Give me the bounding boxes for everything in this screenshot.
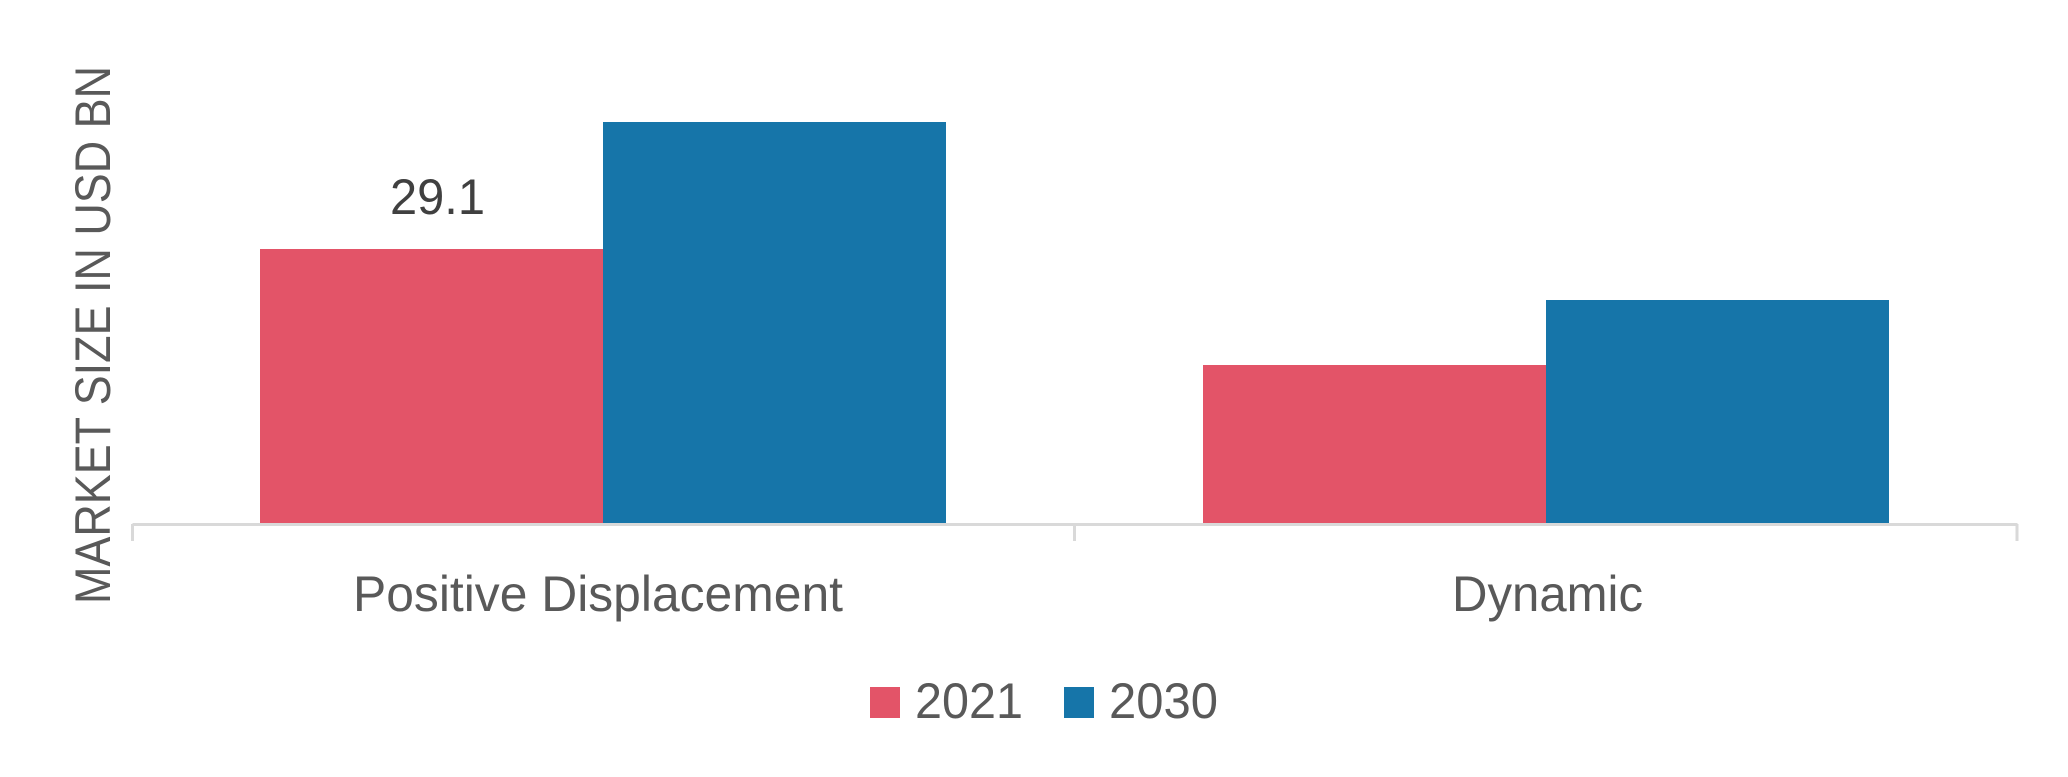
data label: 29.1: 29.1 — [390, 169, 485, 225]
category label: Dynamic: Dynamic — [1452, 566, 1643, 622]
category label: Positive Displacement: Positive Displacement — [353, 566, 843, 622]
legend label: 2030: 2030 — [1109, 673, 1218, 729]
legend label: 2021: 2021 — [915, 673, 1023, 729]
legend swatch: 2030 — [1064, 687, 1094, 718]
x axis with tick marks — [132, 524, 2018, 541]
y-axis title: MARKET SIZE IN USD BN — [65, 66, 121, 604]
bar: Positive Displacement 2030 — [603, 122, 946, 523]
bar: Dynamic 2030 — [1546, 300, 1889, 523]
bar: Positive Displacement 2021 — [260, 249, 603, 523]
bar: Dynamic 2021 — [1203, 365, 1546, 523]
legend swatch: 2021 — [870, 687, 900, 718]
legend — [870, 673, 1218, 729]
